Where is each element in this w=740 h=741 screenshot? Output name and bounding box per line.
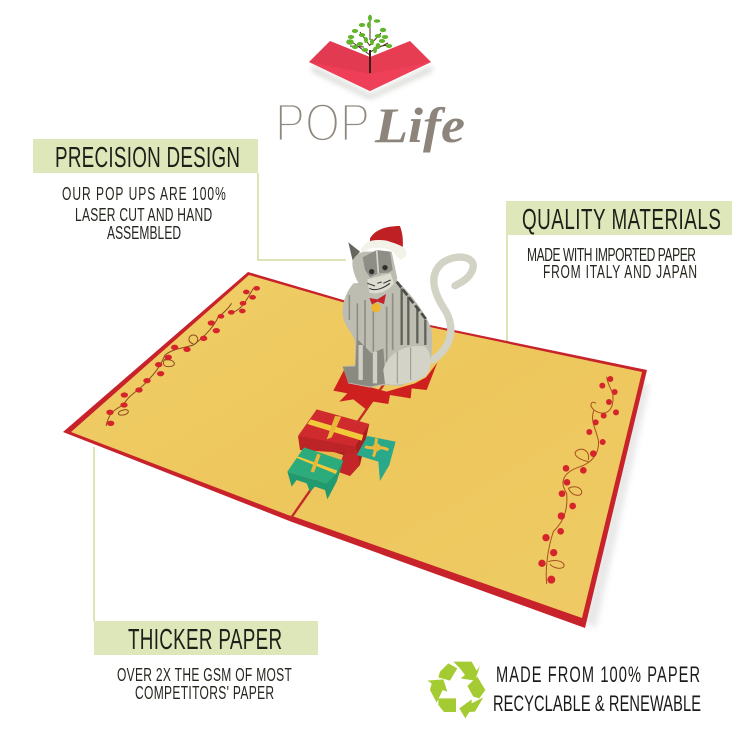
logo wordmark Life: Life	[374, 97, 465, 153]
card yellow inner	[71, 275, 642, 618]
heading banner	[33, 139, 258, 173]
text block	[117, 666, 292, 704]
icon: open red book	[309, 41, 431, 91]
text block: MADE WITH IMPORTED PAPER	[527, 246, 696, 266]
card fold	[291, 325, 425, 518]
cat ear	[348, 242, 360, 261]
panel: quality materials	[506, 201, 732, 283]
red gift	[298, 409, 369, 476]
teal gift	[357, 436, 396, 481]
text block: OVER 2X THE GSM OF MOST	[117, 666, 292, 686]
bow and bell	[369, 294, 386, 305]
card red backing	[63, 272, 647, 628]
text block: FROM ITALY AND JAPAN	[543, 263, 697, 283]
text block: LASER CUT AND HAND	[75, 206, 212, 226]
text block: COMPETITORS' PAPER	[135, 684, 274, 704]
cat muzzle	[367, 273, 394, 293]
santa hat	[370, 226, 403, 248]
connector lines	[94, 173, 507, 621]
text block	[527, 246, 697, 283]
cat head	[352, 252, 397, 294]
cat forehead	[363, 250, 393, 277]
heading banner	[506, 201, 732, 235]
panel: precision design	[33, 139, 258, 244]
cat haunch	[383, 346, 431, 385]
text block: ASSEMBLED	[107, 224, 181, 244]
pop-up: gifts	[287, 409, 396, 499]
heading: THICKER PAPER	[128, 624, 282, 656]
pop-up: cat	[333, 226, 473, 409]
text block: MADE FROM 100% PAPER	[496, 663, 700, 688]
logo: Pop Life	[275, 15, 465, 153]
heading: PRECISION DESIGN	[55, 142, 240, 174]
icon: recycle	[427, 662, 485, 718]
green gift	[287, 447, 343, 499]
panel: recyclable	[427, 662, 701, 718]
text block: RECYCLABLE & RENEWABLE	[493, 692, 701, 717]
cat body stripes	[349, 293, 393, 370]
cat eyes and nose	[369, 269, 374, 274]
icon: tree	[346, 15, 392, 73]
vine: left	[106, 286, 260, 426]
cat red base	[333, 363, 437, 409]
cat body	[343, 280, 432, 388]
panel: thicker paper	[94, 621, 318, 704]
heading banner	[94, 621, 318, 655]
logo wordmark POP: POP	[275, 93, 370, 153]
heading: QUALITY MATERIALS	[522, 204, 721, 236]
text block	[62, 185, 226, 244]
cat tail	[433, 257, 473, 360]
cat front legs	[343, 338, 386, 387]
card shadow	[584, 380, 650, 628]
text block: OUR POP UPS ARE 100%	[62, 185, 226, 205]
icon: logo shadow	[312, 66, 432, 99]
text block	[493, 663, 701, 717]
panel: open greeting card	[63, 226, 650, 628]
vine: right	[538, 376, 619, 584]
